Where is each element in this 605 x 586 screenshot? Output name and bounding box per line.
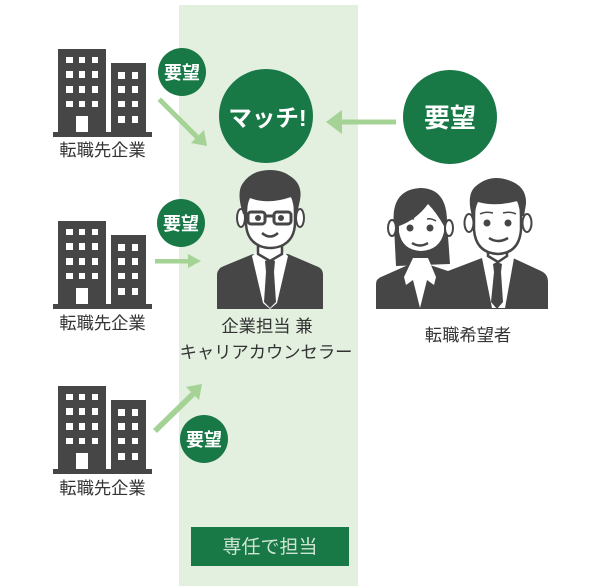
- icon: company building 2: [53, 221, 152, 309]
- label: job seekers: 転職希望者: [425, 325, 511, 345]
- badge: candidate request: [403, 70, 497, 164]
- arrow: company 2 to consultant: [155, 254, 201, 268]
- panel: dedicated staff background: [179, 5, 358, 586]
- arrow: company 1 to match: [158, 98, 207, 146]
- arrow: candidate to match: [326, 110, 396, 134]
- icon: company building 3: [53, 386, 152, 474]
- badge: request 1: 要望: [164, 63, 200, 83]
- arrow: company 3 to consultant: [153, 384, 202, 433]
- label: consultant: [180, 316, 352, 362]
- badge: match: [219, 69, 313, 163]
- icon: company building 1: [53, 49, 152, 137]
- label: consultant: 企業担当 兼: [221, 316, 313, 336]
- badge: request 3: 要望: [186, 430, 222, 450]
- label: consultant: キャリアカウンセラー: [180, 342, 352, 362]
- badge: candidate request: 要望: [424, 103, 476, 133]
- button: dedicated staff: 専任で担当: [222, 536, 318, 558]
- label: company 2: 転職先企業: [59, 313, 146, 333]
- badge: request 3: [180, 415, 228, 463]
- badge: match: マッチ!: [228, 105, 307, 131]
- icon: job seekers: [376, 178, 548, 309]
- badge: request 1: [158, 48, 206, 96]
- label: company 1: 転職先企業: [59, 140, 146, 160]
- icon: consultant with glasses: [217, 170, 323, 309]
- button: dedicated staff: [191, 527, 349, 566]
- badge: request 2: 要望: [163, 214, 199, 234]
- badge: request 2: [157, 199, 205, 247]
- label: company 3: 転職先企業: [59, 478, 146, 498]
